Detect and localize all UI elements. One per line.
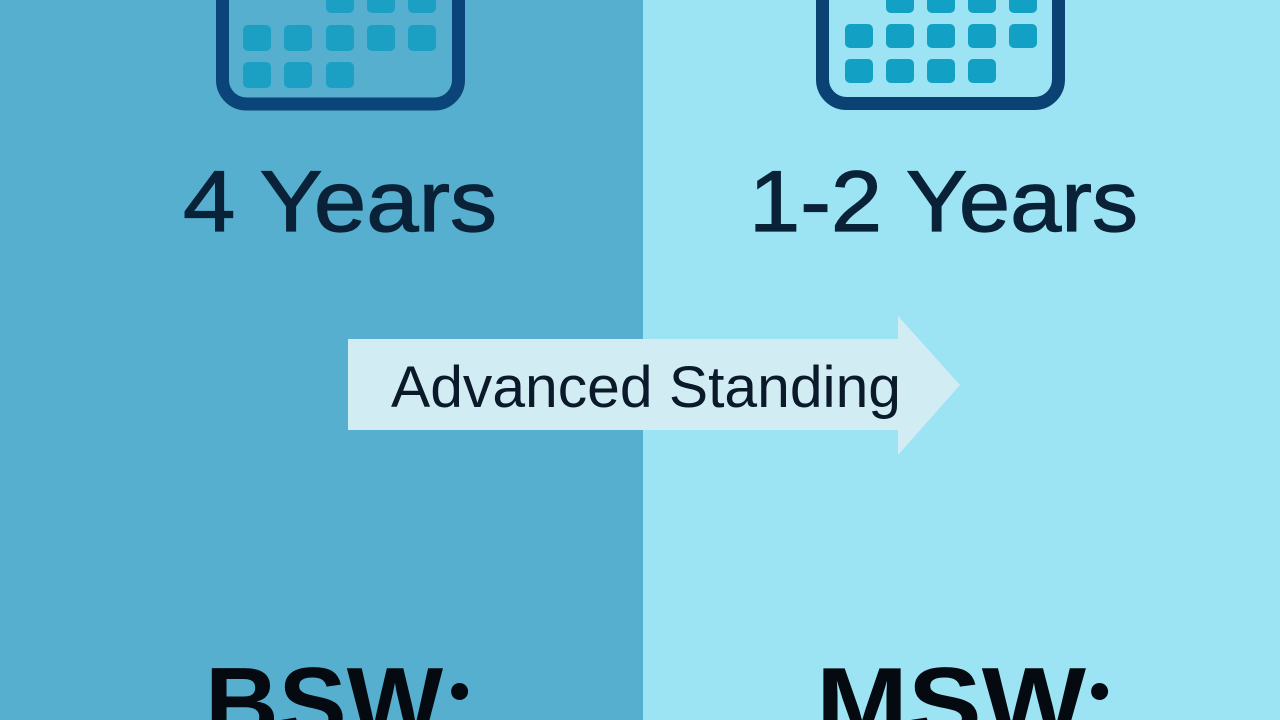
BSW heading: [212, 667, 468, 720]
BSW duration: 4 Years: [183, 154, 497, 250]
MSW heading: [823, 667, 1108, 720]
icon: BSW calendar: [222, 0, 458, 104]
icon: MSW calendar: [822, 0, 1058, 104]
panel: MSW: [755, 0, 1136, 720]
MSW duration: 1-2 Years: [749, 154, 1138, 250]
panel: BSW: [0, 0, 643, 720]
arrow: Advanced Standing: [348, 316, 960, 455]
arrow label: Advanced Standing: [391, 355, 901, 420]
